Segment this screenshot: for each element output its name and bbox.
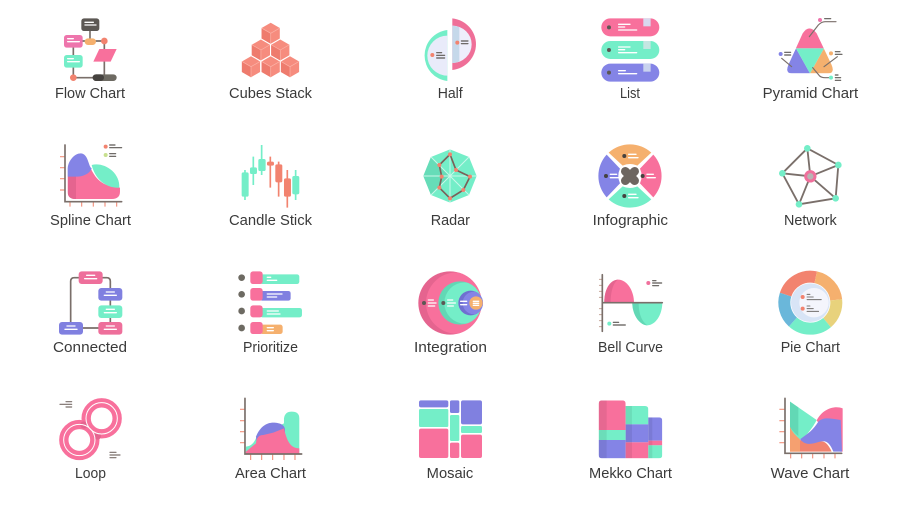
- icon: cubes stack: [242, 23, 299, 77]
- panel: Mosaic: [419, 400, 482, 482]
- panel: Infographic: [593, 144, 668, 229]
- icon: radar: [423, 149, 477, 203]
- panel: Radar: [423, 149, 477, 229]
- panel: Half: [425, 18, 476, 102]
- label: Connected: [53, 340, 127, 356]
- icon: candlesticks: [242, 145, 299, 208]
- icon: wave chart: [779, 398, 843, 458]
- panel: Cubes Stack: [229, 23, 313, 102]
- label: Radar: [431, 213, 470, 229]
- label: Cubes Stack: [229, 86, 313, 102]
- label: List: [620, 86, 640, 102]
- panel: Area Chart: [235, 398, 306, 482]
- panel: Pyramid Chart: [763, 18, 858, 102]
- icon: spline chart: [60, 145, 122, 207]
- label: Spline Chart: [50, 213, 131, 229]
- panel: List: [601, 18, 659, 102]
- icon: pyramid: [779, 18, 842, 80]
- label: Area Chart: [235, 466, 306, 482]
- label: Mosaic: [427, 466, 473, 482]
- icon: four petal infographic: [598, 144, 662, 208]
- label: Mekko Chart: [589, 466, 672, 482]
- label: Bell Curve: [598, 340, 663, 356]
- label: Half: [438, 86, 464, 102]
- panel: Network: [779, 145, 842, 229]
- panel: Candle Stick: [229, 145, 313, 229]
- icon: list: [601, 18, 659, 82]
- icon: donut pie: [784, 277, 836, 329]
- label: Integration: [414, 340, 487, 356]
- icon: network graph: [779, 145, 842, 208]
- icon: flow chart: [64, 18, 117, 81]
- icon: mosaic chart: [419, 400, 482, 458]
- icon: nested circles: [418, 271, 487, 335]
- icon: bell curve: [599, 275, 662, 331]
- panel: Spline Chart: [50, 145, 131, 229]
- icon: prioritized bars: [238, 271, 302, 334]
- panel: Pie Chart: [781, 277, 840, 356]
- panel: Prioritize: [238, 271, 302, 356]
- label: Flow Chart: [55, 86, 125, 102]
- label: Loop: [75, 466, 106, 482]
- label: Infographic: [593, 213, 668, 229]
- panel: Flow Chart: [55, 18, 125, 102]
- panel: Connected: [53, 271, 127, 356]
- icon: half circles: [425, 18, 476, 81]
- label: Network: [784, 213, 837, 229]
- panel: Mekko Chart: [589, 400, 672, 482]
- label: Pyramid Chart: [763, 86, 858, 102]
- label: Candle Stick: [229, 213, 313, 229]
- panel: Integration: [414, 271, 487, 356]
- icon: connected boxes: [59, 271, 122, 335]
- panel: Bell Curve: [598, 275, 663, 356]
- icon: mekko chart: [599, 400, 662, 458]
- icon: interlocked loop: [60, 402, 120, 458]
- panel: Loop: [60, 402, 120, 482]
- icon: area chart: [240, 398, 302, 460]
- label: Wave Chart: [771, 466, 849, 482]
- label: Pie Chart: [781, 340, 840, 356]
- panel: Wave Chart: [771, 398, 849, 482]
- label: Prioritize: [243, 340, 298, 356]
